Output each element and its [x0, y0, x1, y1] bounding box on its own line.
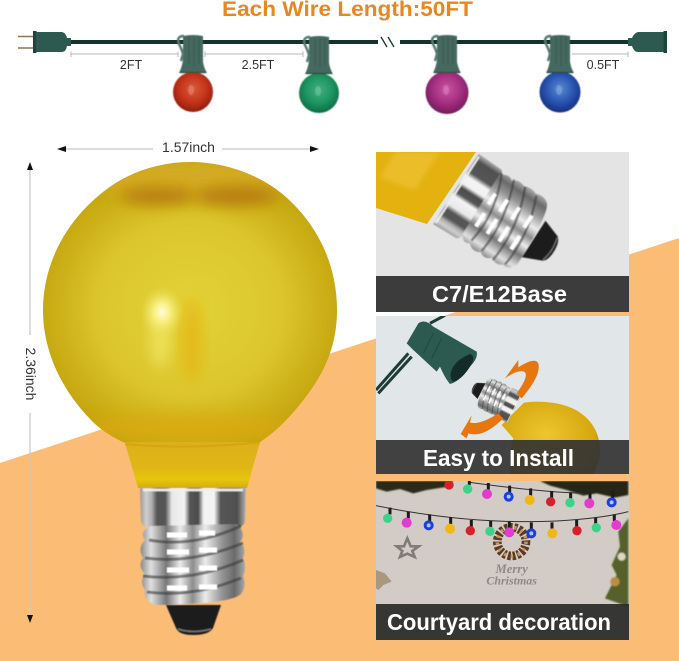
caption: Easy to Install [423, 445, 574, 471]
orange rotate arrow [461, 360, 539, 438]
caption [376, 276, 629, 312]
height dimension: 2.36inch: 2.36inch [23, 348, 39, 400]
base close-up [376, 152, 560, 268]
stars and wreath [376, 527, 537, 590]
dimension: 2FT: 2FT [120, 58, 142, 72]
bottom row lights [383, 514, 621, 538]
caption: C7/E12Base [432, 281, 567, 307]
purple bulb [426, 35, 468, 114]
width dimension: 1.57inch: 1.57inch [162, 139, 215, 155]
dimension: 2FT [71, 52, 178, 72]
stars and wreath: Merry [494, 562, 528, 576]
stars and wreath: Christmas [486, 573, 537, 587]
light sockets [390, 481, 614, 529]
main yellow bulb [40, 160, 340, 635]
dimension: 0.5FT [572, 52, 628, 72]
red bulb [173, 35, 213, 112]
garlands [376, 481, 628, 607]
top row lights [444, 480, 617, 508]
dimension: 2.5FT: 2.5FT [242, 58, 275, 72]
caption [376, 440, 629, 474]
panel: C7/E12 base [376, 152, 629, 312]
strings [376, 482, 628, 522]
caption: Courtyard decoration [387, 609, 611, 635]
small screw base [472, 378, 520, 424]
height dimension: 2.36inch [23, 162, 39, 623]
wire string diagram [18, 31, 667, 114]
dimension: 0.5FT: 0.5FT [587, 58, 620, 72]
panel: courtyard decoration [376, 480, 629, 640]
blue bulb [540, 35, 580, 112]
break mark [381, 37, 394, 47]
screw base [140, 488, 246, 635]
background orange diagonal panel [0, 238, 679, 661]
dimension: 2.5FT [205, 52, 303, 72]
plug [18, 31, 71, 53]
glass globe [40, 160, 340, 489]
wire [70, 40, 630, 44]
yellow bulb [502, 402, 600, 474]
end connector [628, 31, 667, 53]
green socket and wire [376, 315, 477, 393]
width dimension: 1.57inch [57, 139, 319, 155]
green bulb [299, 36, 339, 113]
caption [376, 604, 629, 640]
panel: easy to install [376, 315, 629, 483]
